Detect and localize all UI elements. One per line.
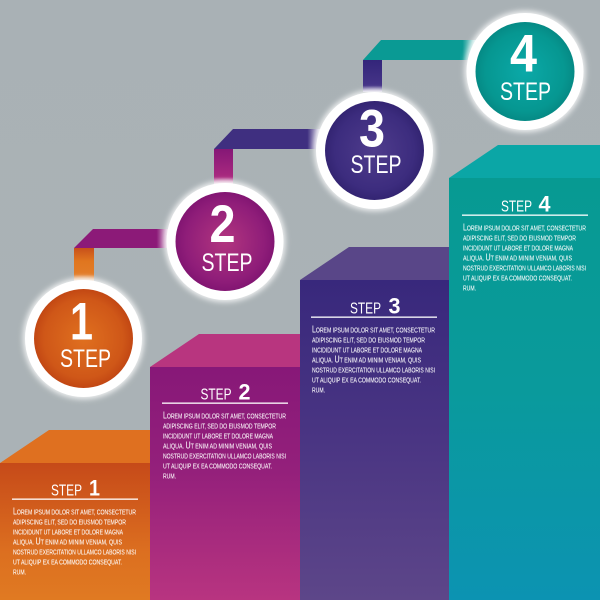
text block: step 2: NOSTRUD EXERCITATION ULLAMCO LABORIS NISI (163, 452, 286, 460)
step 3 number: 3 (359, 100, 385, 158)
text block: step 3: NOSTRUD EXERCITATION ULLAMCO LABORIS NISI (312, 366, 435, 374)
step 1 number: 1 (70, 292, 93, 352)
text block: step 1: NOSTRUD EXERCITATION ULLAMCO LABORIS NISI (13, 548, 136, 556)
panel: step 2 bar (150, 334, 300, 600)
heading: step 2: STEP (200, 386, 232, 404)
step 2 number: 2 (210, 195, 236, 254)
text block: step 1: UT ALIQUIP EX EA COMMODO CONSEQUAT. (13, 558, 122, 566)
text block: step 3: LOREM IPSUM DOLOR SIT AMET, CONSECTETUR (312, 324, 435, 336)
icon: step 4 circle (464, 11, 586, 132)
text block: step 3: INCIDIDUNT UT LABORE ET DOLORE MAGNA (312, 346, 422, 354)
step 3 label: STEP (350, 151, 402, 179)
heading: step 4: STEP (501, 198, 532, 216)
text block: step 3: ADIPISCING ELIT, SED DO EIUSMOD TEMPOR (312, 336, 425, 344)
text block: step 4 (462, 192, 588, 292)
panel: step 3 bar (300, 247, 449, 600)
icon: step 2 circle (164, 181, 286, 302)
text block: step 1 (12, 476, 138, 576)
step 1 label: STEP (60, 345, 111, 373)
text block: step 1: INCIDIDUNT UT LABORE ET DOLORE MAGNA (13, 528, 123, 536)
text block: step 3: RUM. (312, 386, 325, 394)
text block: step 2: UT ALIQUIP EX EA COMMODO CONSEQUAT. (163, 462, 272, 470)
text block: step 1: RUM. (13, 568, 26, 576)
text block: step 4: RUM. (463, 284, 476, 292)
icon: step 3 circle (314, 90, 435, 211)
heading: step 1: STEP (51, 482, 82, 500)
text block: step 4: 4 (538, 192, 551, 216)
text block: step 2: LOREM IPSUM DOLOR SIT AMET, CONSECTETUR (163, 410, 286, 422)
panel: step 1 bar (0, 430, 150, 600)
text block: step 2: RUM. (163, 472, 176, 480)
arrow: connector step 1 to 2 (74, 229, 170, 281)
text block: step 2: 2 (238, 380, 250, 404)
step 2 label: STEP (202, 249, 252, 277)
text block: step 1: ADIPISCING ELIT, SED DO EIUSMOD TEMPOR (13, 518, 126, 526)
text block: step 1: ALIQUA. UT ENIM AD MINIM VENIAM, QUIS (13, 536, 122, 548)
icon: step 1 circle (23, 278, 144, 399)
text block: step 2: ADIPISCING ELIT, SED DO EIUSMOD TEMPOR (163, 422, 276, 430)
text block: step 3 (311, 294, 437, 394)
step 4 number: 4 (510, 24, 537, 84)
text block: step 2 (162, 380, 288, 480)
text block: step 1: LOREM IPSUM DOLOR SIT AMET, CONSECTETUR (13, 506, 136, 518)
panel: step 4 bar (449, 145, 600, 600)
arrow: connector step 2 to 3 (214, 129, 320, 184)
text block: step 3: 3 (388, 294, 400, 318)
text block: step 3: ALIQUA. UT ENIM AD MINIM VENIAM, QUIS (312, 354, 421, 366)
text block: step 1: 1 (89, 476, 100, 500)
step 4 label: STEP (500, 78, 551, 106)
text block: step 2: ALIQUA. UT ENIM AD MINIM VENIAM, QUIS (163, 440, 272, 452)
arrow: connector step 3 to 4 (363, 40, 476, 92)
text block: step 2: INCIDIDUNT UT LABORE ET DOLORE MAGNA (163, 432, 273, 440)
text block: step 3: UT ALIQUIP EX EA COMMODO CONSEQUAT. (312, 376, 421, 384)
heading: step 3: STEP (350, 300, 381, 318)
